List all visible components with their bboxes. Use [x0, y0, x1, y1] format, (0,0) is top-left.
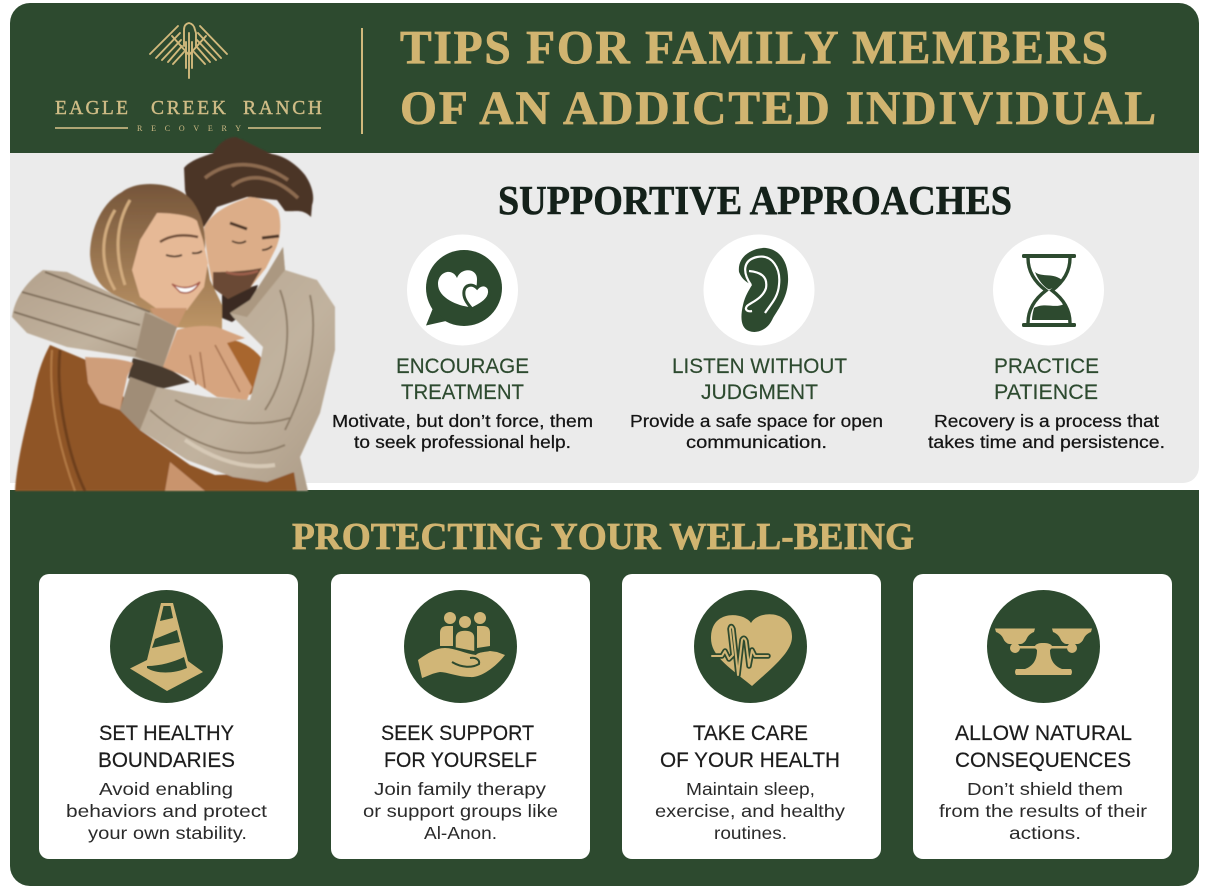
item: encourage treatment: Motivate, but don’t force, them [332, 411, 593, 431]
icon: ear [739, 248, 788, 332]
card: set healthy boundaries: your own stability. [88, 823, 247, 843]
card: seek support for yourself: FOR YOURSELF [384, 749, 537, 772]
woman's back hand [85, 357, 133, 410]
item: listen without judgment: LISTEN WITHOUT [672, 355, 847, 378]
icon: eagle emblem [150, 23, 227, 78]
man's top hand [163, 326, 252, 400]
card: seek support for yourself: Al-Anon. [424, 823, 497, 843]
item: listen without judgment: communication. [686, 432, 827, 452]
icon: speech bubble with hearts [426, 250, 502, 326]
card: take care of your health: OF YOUR HEALTH [660, 749, 840, 772]
card: allow natural consequences: ALLOW NATURAL [955, 722, 1132, 745]
icon: traffic cone [130, 603, 203, 691]
item: practice patience: Recovery is a process that [934, 411, 1159, 431]
logo wordmark: RANCH [243, 98, 322, 119]
item: encourage treatment: ENCOURAGE [396, 355, 529, 378]
man's face [204, 197, 280, 298]
title: TIPS FOR FAMILY MEMBERS [400, 22, 1108, 74]
man's collar and torso with right sweater arm [120, 247, 335, 491]
icon: hourglass [1022, 254, 1076, 327]
icon: balance scale [995, 628, 1092, 675]
card: seek support for yourself: SEEK SUPPORT [381, 722, 534, 745]
heading: protecting your well-being: PROTECTING YOUR WELL-BEING [292, 516, 914, 558]
dark gap between the arms [128, 358, 190, 390]
card: seek support for yourself: Join family therapy [374, 779, 546, 799]
title: OF AN ADDICTED INDIVIDUAL [400, 83, 1156, 135]
item: listen without judgment [630, 234, 883, 452]
card: allow natural consequences [913, 574, 1172, 859]
card: seek support for yourself: or support groups like [363, 801, 558, 821]
photo: embracing couple [12, 137, 335, 491]
item: practice patience [928, 234, 1165, 452]
icon: people in a hand [418, 612, 505, 678]
card: allow natural consequences: actions. [1009, 823, 1081, 843]
item: practice patience: PRACTICE [994, 355, 1099, 378]
panel: protecting your well-being [10, 490, 1199, 886]
man's neck shadow [222, 285, 258, 322]
teddy coat patch [218, 339, 263, 395]
logo: Eagle Creek Ranch Recovery [55, 23, 322, 133]
header band [10, 3, 1199, 153]
item: encourage treatment [332, 234, 593, 452]
card: set healthy boundaries: SET HEALTHY [99, 722, 234, 745]
logo wordmark: CREEK [151, 98, 226, 119]
logo subline: RECOVERY [137, 124, 241, 133]
item: practice patience: takes time and persistence. [928, 432, 1165, 452]
card: take care of your health: Maintain sleep, [686, 779, 815, 799]
panel: supportive approaches [10, 153, 1199, 483]
card: take care of your health [622, 574, 881, 859]
logo wordmark: EAGLE [55, 98, 128, 119]
card: set healthy boundaries [39, 574, 298, 859]
logo wordmark [55, 98, 322, 119]
card: set healthy boundaries: Avoid enabling [99, 779, 233, 799]
card: allow natural consequences: CONSEQUENCES [955, 749, 1131, 772]
item: encourage treatment: to seek professional help. [354, 432, 571, 452]
item: practice patience: PATIENCE [994, 381, 1098, 404]
item: listen without judgment: JUDGMENT [701, 381, 818, 404]
title [400, 22, 1156, 135]
card: take care of your health: exercise, and healthy [655, 801, 845, 821]
card: allow natural consequences: Don’t shield them [967, 779, 1123, 799]
card: seek support for yourself [331, 574, 590, 859]
man's left sweater arm [12, 270, 177, 367]
card: take care of your health: routines. [714, 823, 787, 843]
card: set healthy boundaries: BOUNDARIES [98, 749, 235, 772]
card: allow natural consequences: from the results of their [939, 801, 1147, 821]
icon: heart with pulse [711, 614, 792, 686]
card: set healthy boundaries: behaviors and protect [66, 801, 267, 821]
man's hair [184, 137, 313, 227]
woman's hair [90, 184, 222, 330]
woman's teddy coat [15, 345, 308, 491]
card: take care of your health: TAKE CARE [693, 722, 808, 745]
heading: supportive approaches: SUPPORTIVE APPROACHES [498, 177, 1012, 223]
item: listen without judgment: Provide a safe space for open [630, 411, 883, 431]
item: encourage treatment: TREATMENT [401, 381, 524, 404]
woman's face [132, 213, 208, 311]
